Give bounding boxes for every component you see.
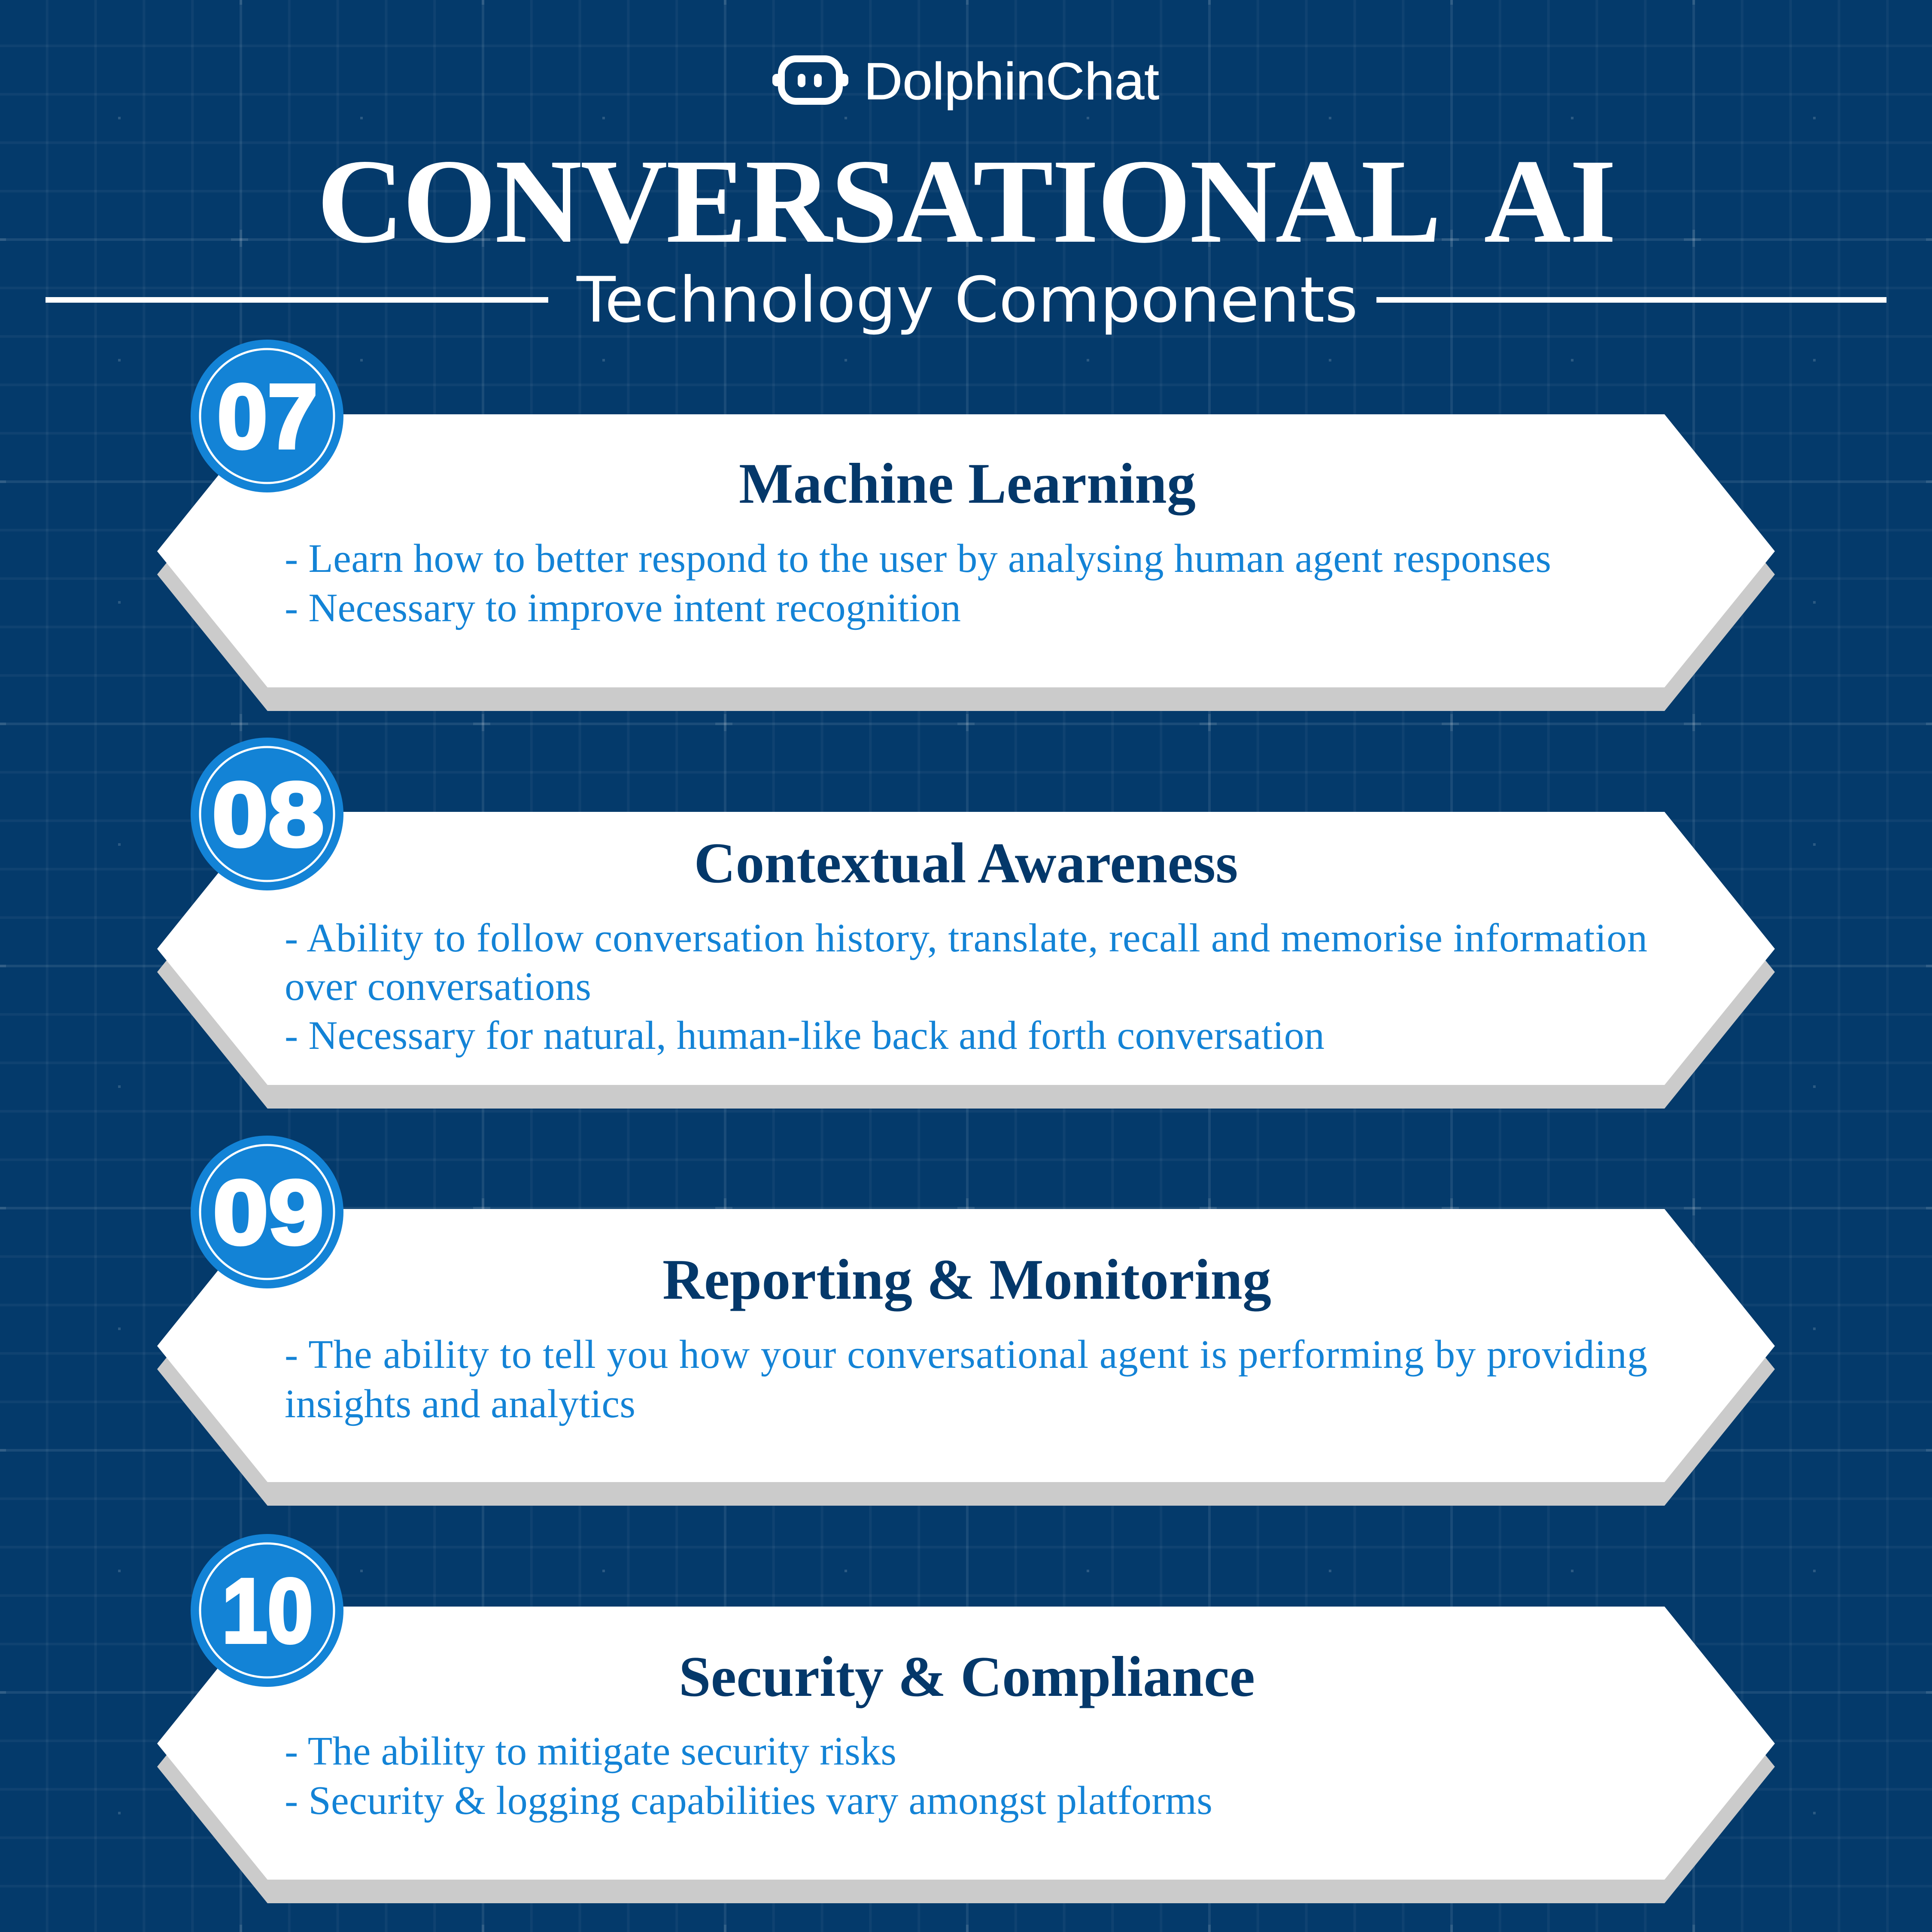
badge 07: 07 — [217, 365, 318, 467]
title: CONVERSATIONAL AI — [317, 134, 1616, 268]
card shadow — [157, 438, 1775, 711]
card shadow — [157, 835, 1775, 1109]
description: - Necessary for natural, human-like back and forth conversation — [285, 1013, 1324, 1058]
panel: 10 Security & Compliance — [157, 1534, 1775, 1903]
logo wordmark: DolphinChat — [864, 52, 1159, 110]
description — [285, 1729, 1212, 1823]
panel: 07 Machine Learning — [157, 340, 1775, 711]
description — [285, 1332, 1647, 1426]
description — [285, 916, 1647, 1058]
card shadow — [157, 1630, 1775, 1903]
badge 08 — [191, 738, 343, 890]
subtitle with side rules — [46, 264, 1886, 337]
description: insights and analytics — [285, 1382, 635, 1426]
badge 07 — [191, 340, 343, 492]
card body — [157, 414, 1775, 687]
card body — [157, 1607, 1775, 1880]
badge 08: 08 — [212, 763, 324, 865]
card shadow — [157, 1233, 1775, 1506]
description: over conversations — [285, 964, 591, 1009]
panel: 09 Reporting & Monitoring — [157, 1136, 1775, 1506]
description: - The ability to tell you how your conversational agent is performing by providing — [285, 1332, 1647, 1377]
heading: Machine Learning — [739, 452, 1196, 516]
description: - Ability to follow conversation history, translate, recall and memorise information — [285, 916, 1647, 960]
badge 09 — [191, 1136, 343, 1288]
heading: Contextual Awareness — [694, 831, 1238, 895]
subtitle with side rules: Technology Components — [576, 264, 1358, 337]
logo: DolphinChat — [772, 52, 1159, 110]
panel: 08 Contextual Awareness — [157, 738, 1775, 1109]
description: - Necessary to improve intent recognition — [285, 586, 961, 630]
description: - The ability to mitigate security risks — [285, 1729, 896, 1774]
icon: chatbot head — [772, 59, 848, 101]
card body — [157, 812, 1775, 1085]
description — [285, 536, 1551, 630]
badge 09: 09 — [213, 1161, 324, 1263]
heading: Security & Compliance — [679, 1645, 1255, 1708]
description: - Security & logging capabilities vary amongst platforms — [285, 1778, 1212, 1823]
description: - Learn how to better respond to the user by analysing human agent responses — [285, 536, 1551, 581]
badge 10 — [191, 1534, 343, 1687]
heading: Reporting & Monitoring — [662, 1248, 1271, 1312]
card body — [157, 1209, 1775, 1482]
badge 10: 10 — [222, 1560, 313, 1662]
